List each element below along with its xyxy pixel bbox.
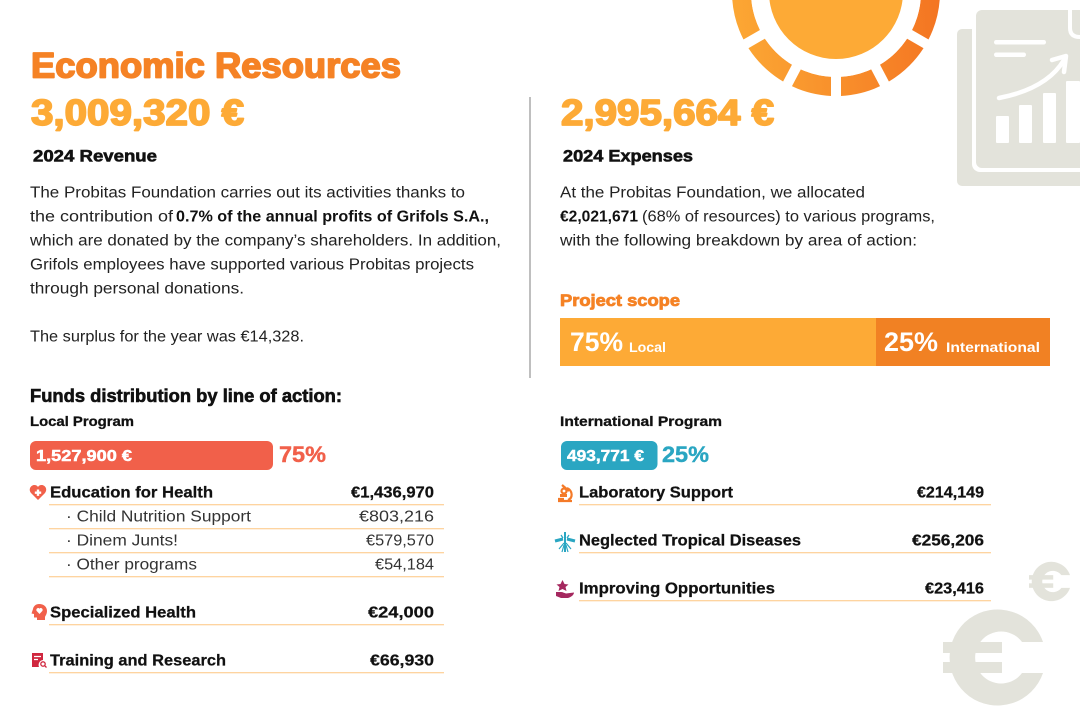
row: other programs: · Other programs [66, 556, 197, 574]
row: neglected tropical diseases: Neglected Tropical Diseases [579, 532, 801, 550]
international program total bar: 493,771 € [567, 448, 644, 465]
icon: head with heart [32, 604, 47, 620]
row: laboratory support [579, 484, 991, 505]
project scope stacked bar: 75% [570, 327, 623, 357]
row: education for health: €1,436,970 [351, 484, 434, 502]
revenue label: 2024 Revenue [33, 146, 157, 166]
revenue description [29, 184, 501, 346]
local program total bar [30, 441, 326, 470]
international program heading: International Program [560, 413, 722, 429]
row: improving opportunities: Improving Opportunities [579, 580, 775, 598]
expenses description: At the Probitas Foundation, we allocated [560, 184, 865, 202]
row: child nutrition support: €803,216 [359, 508, 434, 526]
project scope heading: Project scope [560, 292, 680, 310]
expenses figure: 2,995,664 € [561, 92, 774, 133]
local program heading: Local Program [30, 413, 134, 429]
revenue figure: 3,009,320 € [31, 92, 244, 133]
icon: small euro symbol [1029, 562, 1070, 601]
icon: document with magnifier [32, 653, 46, 668]
row: laboratory support: €214,149 [917, 484, 984, 502]
row: training and research: €66,930 [370, 652, 434, 670]
row: dinem junts: €579,570 [366, 532, 434, 550]
row: improving opportunities [579, 580, 991, 601]
icon: decorative sun [737, 0, 935, 105]
international program total bar: 25% [662, 442, 709, 467]
project scope stacked bar [560, 318, 1050, 366]
expenses label: 2024 Expenses [563, 146, 693, 166]
icon: microscope [558, 485, 572, 501]
revenue description: through personal donations. [30, 280, 244, 298]
revenue description: The Probitas Foundation carries out its activities thanks to [30, 184, 465, 202]
local program total bar: 75% [279, 442, 326, 467]
row: laboratory support: Laboratory Support [579, 484, 734, 502]
row: neglected tropical diseases [579, 532, 991, 553]
project scope stacked bar: International [946, 339, 1040, 355]
row: child nutrition support [49, 508, 444, 529]
revenue description: which are donated by the company’s shareholders. In addition, [29, 232, 501, 250]
revenue description: The surplus for the year was €14,328. [30, 328, 304, 346]
revenue description: 0.7% of the annual profits of Grifols S.A., [176, 208, 489, 226]
row: improving opportunities: €23,416 [925, 580, 984, 598]
row: neglected tropical diseases: €256,206 [912, 532, 984, 550]
icon: report with growth chart [957, 6, 1080, 186]
revenue description: the contribution of [30, 208, 174, 226]
row: education for health [49, 484, 444, 505]
expenses description: with the following breakdown by area of action: [559, 232, 917, 250]
row: education for health: Education for Health [50, 484, 213, 502]
row: dinem junts [49, 532, 444, 553]
row: specialized health: Specialized Health [50, 604, 196, 622]
expenses description: (68% of resources) to various programs, [642, 208, 935, 226]
local program total bar: 1,527,900 € [36, 448, 132, 465]
revenue description: Grifols employees have supported various Probitas projects [30, 256, 474, 274]
project scope stacked bar: 25% [884, 327, 938, 357]
row: dinem junts: · Dinem Junts! [66, 532, 178, 550]
row: child nutrition support: · Child Nutrition Support [66, 508, 252, 526]
row: training and research: Training and Research [50, 652, 226, 670]
row: training and research [49, 652, 444, 673]
icon: mosquito [555, 532, 575, 552]
title: Economic Resources [31, 46, 401, 86]
icon: large euro symbol [943, 610, 1043, 706]
row: specialized health: €24,000 [368, 604, 434, 622]
row: specialized health [49, 604, 444, 625]
expenses description [559, 184, 935, 250]
icon: heart with cross [30, 485, 46, 500]
project scope stacked bar: Local [629, 339, 666, 355]
international program total bar [561, 441, 709, 470]
row: other programs [49, 556, 444, 577]
funds distribution heading: Funds distribution by line of action: [30, 386, 342, 406]
icon: hand holding star [556, 580, 574, 598]
expenses description: €2,021,671 [560, 208, 638, 226]
row: other programs: €54,184 [375, 556, 434, 574]
